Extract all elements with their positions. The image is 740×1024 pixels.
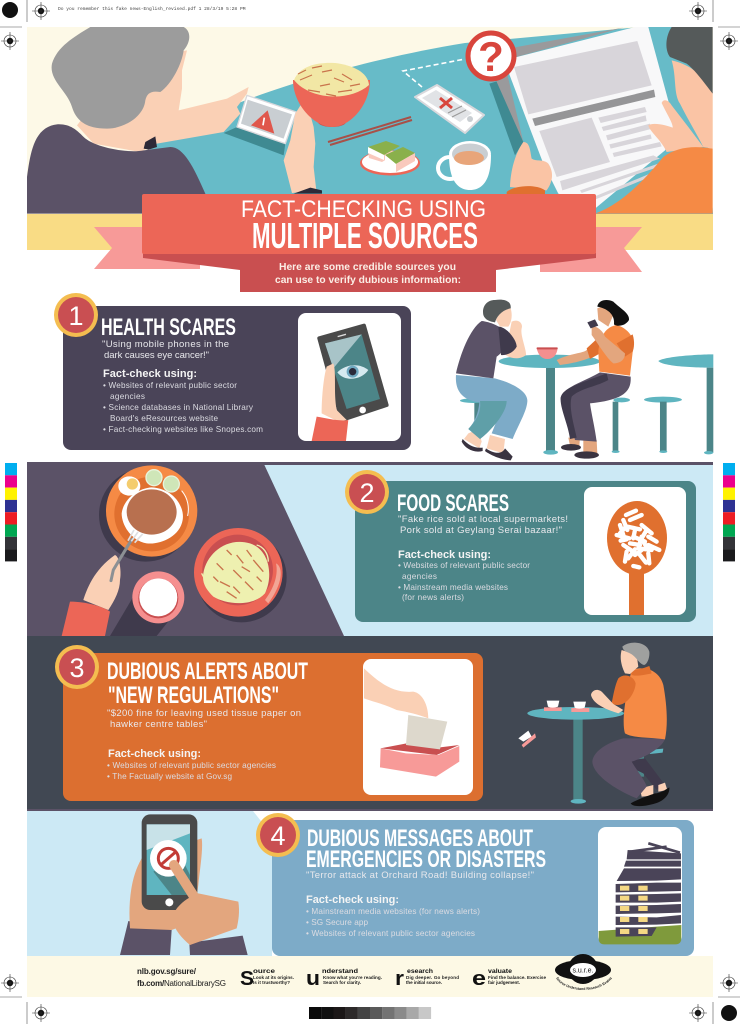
footer links [137, 967, 226, 988]
fact-check heading: Fact-check using: [306, 894, 399, 906]
source list [398, 561, 530, 602]
scene: man at table [518, 643, 669, 806]
woman left [456, 300, 527, 460]
heading: HEALTH SCARES [101, 314, 236, 341]
S.U.R.E: research: r [395, 968, 404, 990]
dashed link [403, 59, 465, 87]
footer links: nlb.gov.sg/sure/ [137, 967, 197, 976]
fallen tissue packet [518, 731, 536, 748]
section 2 background [27, 462, 713, 636]
source list [306, 907, 480, 938]
badge 4: 4 [270, 821, 286, 851]
subtitle: can use to verify dubious information: [275, 274, 461, 286]
header illustration [27, 27, 713, 250]
chopsticks [328, 117, 412, 145]
badge 1: 1 [68, 301, 84, 331]
illustration: hands with phone [120, 814, 248, 955]
panel 1: health scares [54, 293, 411, 450]
fact-check heading: Fact-check using: [103, 368, 197, 380]
source list [103, 381, 263, 434]
colour bar: left [5, 463, 17, 561]
source list: • Websites of relevant public sector agencies [306, 929, 475, 938]
quote: hawker centre tables" [110, 719, 207, 730]
panel 4: emergencies or disasters [256, 813, 694, 956]
woman reading phone [27, 27, 322, 214]
badge 4 [256, 813, 300, 857]
S.U.R.E: research: Dig deeper. Go beyond [406, 975, 459, 980]
source list: • The Factually website at Gov.sg [107, 772, 232, 781]
subtitle [275, 261, 461, 286]
phone with warning [237, 95, 296, 144]
S.U.R.E: evaluate [472, 968, 546, 990]
badge 1 [54, 293, 98, 337]
heading: FOOD SCARES [397, 490, 509, 517]
phone shadow on table [224, 127, 285, 155]
S.U.R.E: source [240, 968, 294, 990]
S.U.R.E: understand: Search for clarity. [323, 980, 361, 985]
S.U.R.E: understand: Know what you're reading. [323, 975, 382, 980]
quote [102, 339, 229, 361]
S.U.R.E: source: S [240, 968, 254, 990]
printer marks: Do you remember this fake news-English_revised.pdf 1 28/3/19 5:28 PM [58, 6, 246, 12]
heading: DUBIOUS ALERTS ABOUT [107, 658, 308, 685]
source list: agencies [402, 572, 437, 581]
icon box: collapsed building [598, 827, 682, 944]
man: hand on paper [648, 100, 703, 152]
icon box: phone with eye [298, 313, 401, 441]
source list: • Websites of relevant public sector [103, 381, 237, 390]
teal table top [150, 27, 713, 214]
quote: "Terror attack at Orchard Road! Building collapse!" [306, 870, 534, 881]
empty table and stool [644, 354, 713, 454]
S.U.R.E logo: s.u.r.e. [572, 968, 594, 974]
quote: dark causes eye cancer!" [104, 350, 209, 361]
quote [107, 708, 301, 730]
hand with fork [62, 530, 143, 636]
kueh on plate [360, 141, 420, 176]
source list: • SG Secure app [306, 918, 368, 927]
section 4 background [27, 811, 272, 956]
source list: • Fact-checking websites like Snopes.com [103, 425, 263, 434]
S.U.R.E logo: Source Understand Research Evaluate [556, 977, 612, 990]
source list [107, 761, 276, 781]
fact-check heading: Fact-check using: [398, 549, 491, 561]
source list: • Websites of relevant public sector [398, 561, 530, 570]
title line 1: FACT-CHECKING USING [241, 196, 486, 223]
footer links: fb.com/NationalLibrarySG [137, 979, 226, 988]
hand holding phone [284, 103, 316, 193]
heading [306, 825, 546, 873]
source list: • Science databases in National Library [103, 403, 254, 412]
fact-check heading: Fact-check using: [108, 748, 201, 760]
S.U.R.E: source: Look at its origins. [253, 975, 294, 980]
S.U.R.E: understand [306, 968, 382, 990]
panel 2: food scares [345, 470, 696, 622]
source list: • Websites of relevant public sector agencies [107, 761, 276, 770]
title line 2: MULTIPLE SOURCES [252, 215, 478, 256]
badge 2: 2 [359, 478, 375, 508]
panel 3: new regulations [55, 645, 483, 801]
quote: "$200 fine for leaving used tissue paper on [107, 708, 301, 719]
S.U.R.E: evaluate: fair judgement. [488, 980, 520, 985]
quote [398, 514, 568, 536]
newspaper and man [489, 27, 713, 214]
subtitle: Here are some credible sources you [279, 261, 456, 273]
quote: Pork sold at Geylang Serai bazaar!" [400, 525, 562, 536]
man: left hand [510, 142, 552, 190]
woman right [557, 300, 634, 459]
bowl of noodles [293, 63, 370, 127]
tea cup [438, 141, 491, 190]
S.U.R.E: source: ource [253, 968, 275, 975]
question mark badge: ? [478, 33, 504, 80]
bowl [537, 347, 558, 359]
badge 2 [345, 470, 389, 514]
S.U.R.E: research: esearch [407, 968, 433, 975]
source list: Board's eResources website [110, 414, 218, 423]
S.U.R.E: research [395, 968, 459, 990]
badge 3 [55, 645, 99, 689]
plate of noodles [194, 528, 287, 622]
source list: (for news alerts) [402, 593, 464, 602]
source list: • Mainstream media websites [398, 583, 508, 592]
badge 3: 3 [69, 653, 85, 683]
S.U.R.E: evaluate: Find the balance. Exercise [488, 975, 546, 980]
seated man [591, 643, 669, 806]
phone with cross [415, 85, 484, 133]
table [499, 355, 600, 455]
S.U.R.E: understand: nderstand [322, 968, 358, 975]
icon box: tissue box [363, 659, 473, 795]
S.U.R.E: evaluate: valuate [488, 968, 512, 975]
quote: "Using mobile phones in the [102, 339, 229, 350]
illustration: food on table [62, 465, 287, 636]
title banner [94, 194, 642, 292]
table with cups [527, 701, 624, 804]
heading: DUBIOUS MESSAGES ABOUT [307, 825, 533, 852]
quote: "Fake rice sold at local supermarkets! [398, 514, 568, 525]
question mark badge [468, 33, 514, 80]
source list: agencies [110, 392, 145, 401]
scene: two women at hawker table [456, 300, 713, 460]
section 3 background [27, 636, 713, 810]
S.U.R.E: evaluate: e [472, 968, 486, 990]
greyscale bar [309, 1007, 431, 1019]
S.U.R.E: source: Is it trustworthy? [253, 980, 290, 985]
heading: "NEW REGULATIONS" [108, 682, 279, 709]
heading: EMERGENCIES OR DISASTERS [306, 846, 546, 873]
S.U.R.E: understand: u [306, 968, 320, 990]
plate of rice [99, 465, 197, 562]
heading [107, 658, 308, 709]
S.U.R.E: research: the initial source. [406, 980, 442, 985]
bowl shadow [110, 597, 180, 636]
icon box: spoon of rice [584, 487, 686, 615]
ribbon tails [94, 227, 642, 272]
man: hair and face [672, 60, 713, 149]
small bowl [132, 571, 184, 623]
colour bar: right [723, 463, 735, 561]
source list: • Mainstream media websites (for news alerts) [306, 907, 480, 916]
